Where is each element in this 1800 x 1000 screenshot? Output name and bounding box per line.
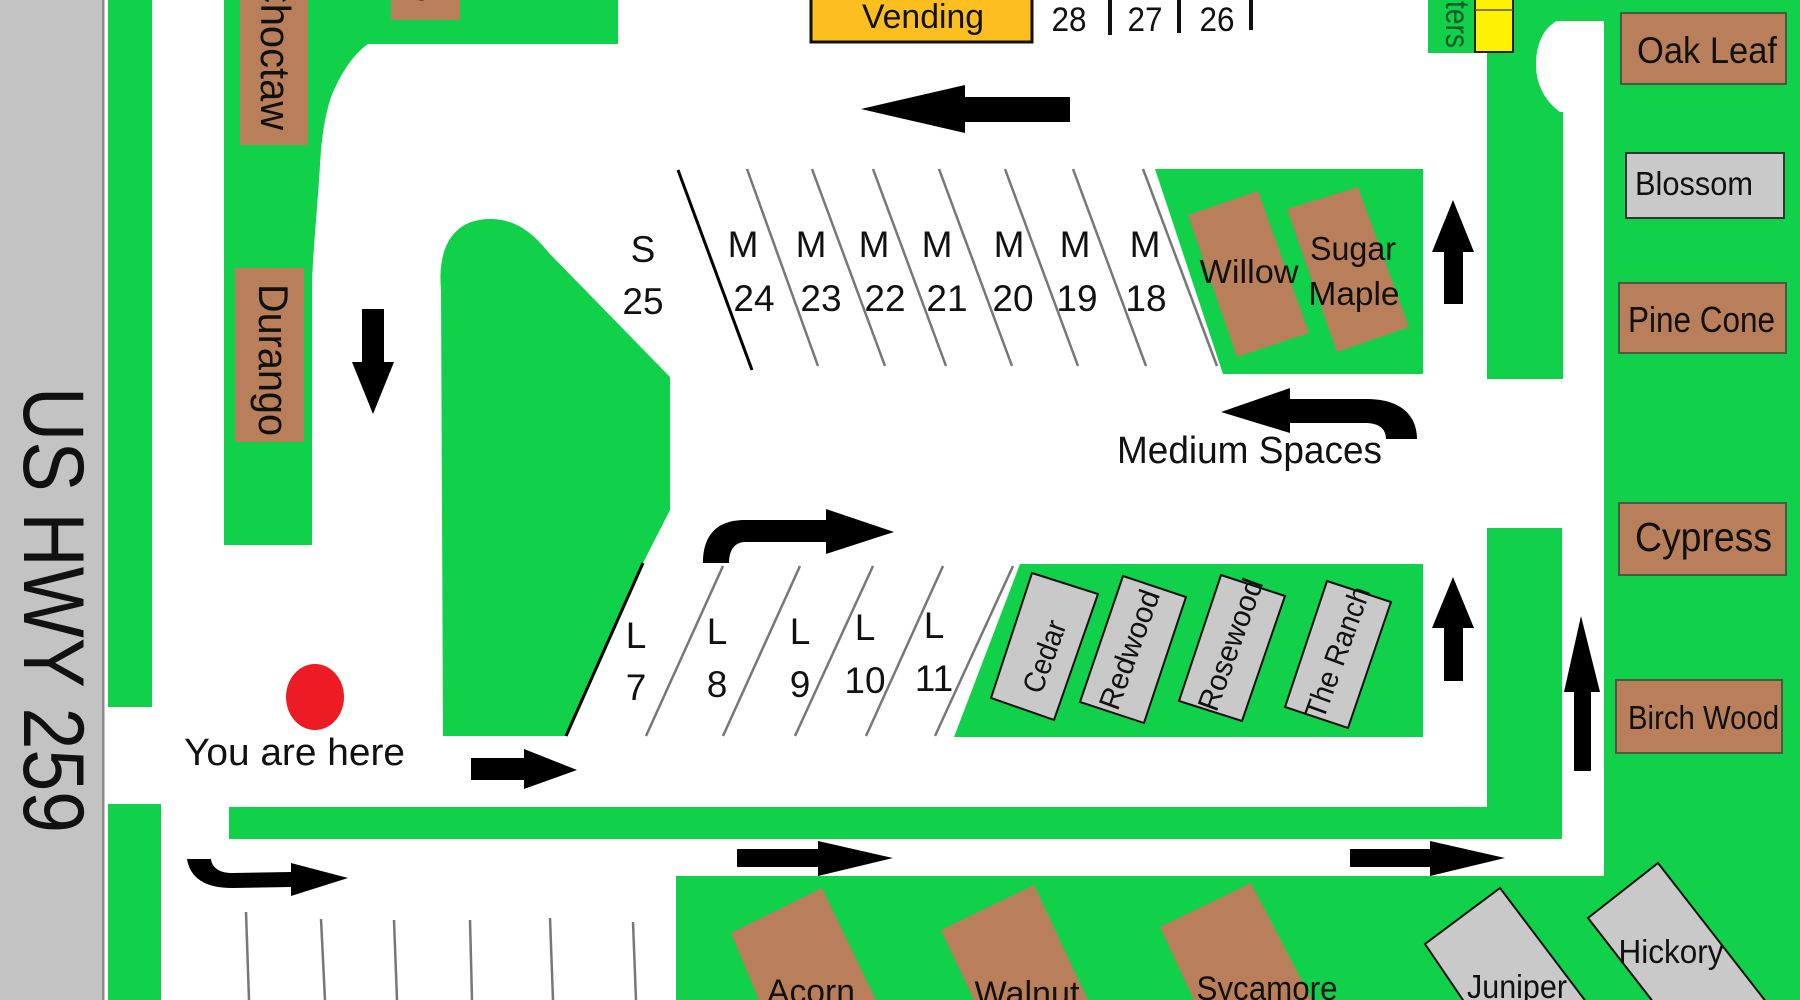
site: Cypress: Cypress: [1635, 514, 1772, 560]
green strips along highway: [108, 0, 161, 1000]
medium space labels: M: [922, 224, 952, 265]
top spaces 28 27 26: 27: [1128, 1, 1162, 39]
large space labels: 9: [790, 664, 810, 705]
arrow: right, bottom lane right: [1350, 841, 1505, 876]
arrow: curved left: [1221, 388, 1417, 439]
label: You are here: You are here: [184, 732, 405, 774]
marker: you are here: [286, 664, 344, 730]
medium space labels: 23: [800, 278, 842, 319]
large space labels: L: [855, 607, 875, 648]
site: Redwood: Redwood: [1093, 585, 1167, 714]
site: Sugar Maple: [1287, 187, 1409, 352]
yellow box: [1475, 0, 1513, 52]
site: Juniper: [1425, 888, 1587, 1000]
road: US HWY 259: US HWY 259: [5, 387, 101, 833]
site: cropped top label: [391, 0, 460, 20]
medium space labels: 24: [733, 278, 775, 319]
site: Birch Wood: [1616, 680, 1782, 753]
black boundary line for medium spaces: [678, 170, 752, 370]
large space labels: L: [626, 615, 646, 656]
arrow: curved lower-left: [187, 859, 348, 896]
large space labels: L: [924, 605, 944, 646]
site: Acorn: [731, 888, 876, 1000]
site: Hickory: Hickory: [1618, 933, 1724, 970]
label: Medium Spaces: Medium Spaces: [1117, 430, 1382, 472]
arrow: right, bottom lane left: [737, 841, 893, 876]
site: Pine Cone: Pine Cone: [1628, 299, 1775, 340]
site: Durango: [235, 268, 304, 442]
top-left green island: [224, 0, 618, 545]
top spaces 28 27 26: 26: [1200, 1, 1234, 39]
arrow: left, upper lane: [861, 85, 1070, 133]
large space labels: L: [707, 611, 727, 652]
space S 25: 25: [622, 281, 664, 322]
site: Cypress: [1619, 503, 1786, 575]
central green island: [440, 219, 670, 736]
green block: Cedar to The Ranch: [954, 564, 1423, 737]
large space labels: 7: [626, 667, 646, 708]
large space labels: 8: [707, 664, 727, 705]
medium space labels: M: [1060, 224, 1090, 265]
medium space labels: 20: [992, 278, 1034, 319]
site: Blossom: [1626, 153, 1784, 218]
site: The Ranch: The Ranch: [1299, 582, 1377, 723]
medium space labels: M: [1130, 224, 1160, 265]
site: Oak Leaf: [1621, 13, 1786, 84]
site: Rosewood: Rosewood: [1192, 574, 1270, 715]
space S 25: S: [631, 229, 655, 270]
right green area: [1604, 0, 1800, 1000]
medium space labels: M: [728, 224, 758, 265]
medium space labels: [728, 224, 1167, 319]
bottom-left parking lines: [246, 912, 636, 1000]
medium space labels: 21: [926, 278, 968, 319]
large space labels: 11: [915, 658, 953, 699]
medium space labels: M: [796, 224, 826, 265]
site: Sugar Maple: Maple: [1308, 275, 1400, 312]
site: Cedar: [991, 573, 1098, 720]
arrow: curved right: [703, 509, 894, 563]
site: Blossom: Blossom: [1635, 165, 1753, 202]
site: Walnut: [941, 885, 1088, 1000]
site: Hickory: [1588, 863, 1767, 1000]
long green band and right divider: [229, 528, 1562, 839]
site: Redwood: [1080, 576, 1186, 723]
large space lines: [646, 566, 1013, 736]
medium space labels: M: [994, 224, 1024, 265]
green block: Willow and Sugar Maple: [1155, 169, 1423, 374]
site: Choctaw: [240, 0, 308, 145]
top spaces 28 27 26: [1052, 0, 1251, 39]
medium space labels: 22: [864, 278, 906, 319]
cropped label: ters: ters: [1439, 1, 1476, 48]
large space labels: L: [790, 611, 810, 652]
island edge line: [566, 563, 643, 736]
large space labels: 10: [844, 660, 886, 701]
site: Cedar: Cedar: [1017, 616, 1073, 698]
arrow: up, upper: [1432, 200, 1474, 304]
site: Sycamore: [1160, 883, 1338, 1000]
medium space labels: 19: [1056, 278, 1098, 319]
vending box: [811, 0, 1032, 42]
site: Sugar Maple: Sugar: [1310, 230, 1396, 267]
bottom green area: [676, 876, 1606, 1000]
top spaces 28 27 26: 28: [1052, 1, 1086, 39]
medium space labels: 18: [1125, 278, 1167, 319]
medium space lines: [747, 169, 1217, 366]
arrow: right from entrance: [471, 749, 577, 789]
large space labels: [626, 605, 953, 708]
upper right divider: [1428, 0, 1604, 379]
arrow: up, lower: [1432, 577, 1474, 681]
site: Oak Leaf: Oak Leaf: [1637, 30, 1778, 71]
site: Birch Wood: Birch Wood: [1628, 699, 1779, 736]
road: US HWY 259: [0, 0, 104, 1000]
space S 25: [622, 229, 664, 322]
arrow: tall up: [1564, 616, 1600, 771]
site: Willow: Willow: [1200, 253, 1299, 290]
arrow: down: [352, 309, 394, 414]
medium space labels: M: [859, 224, 889, 265]
site: Willow: [1188, 191, 1309, 357]
site: Durango: Durango: [250, 284, 297, 436]
site: Pine Cone: [1619, 283, 1786, 353]
